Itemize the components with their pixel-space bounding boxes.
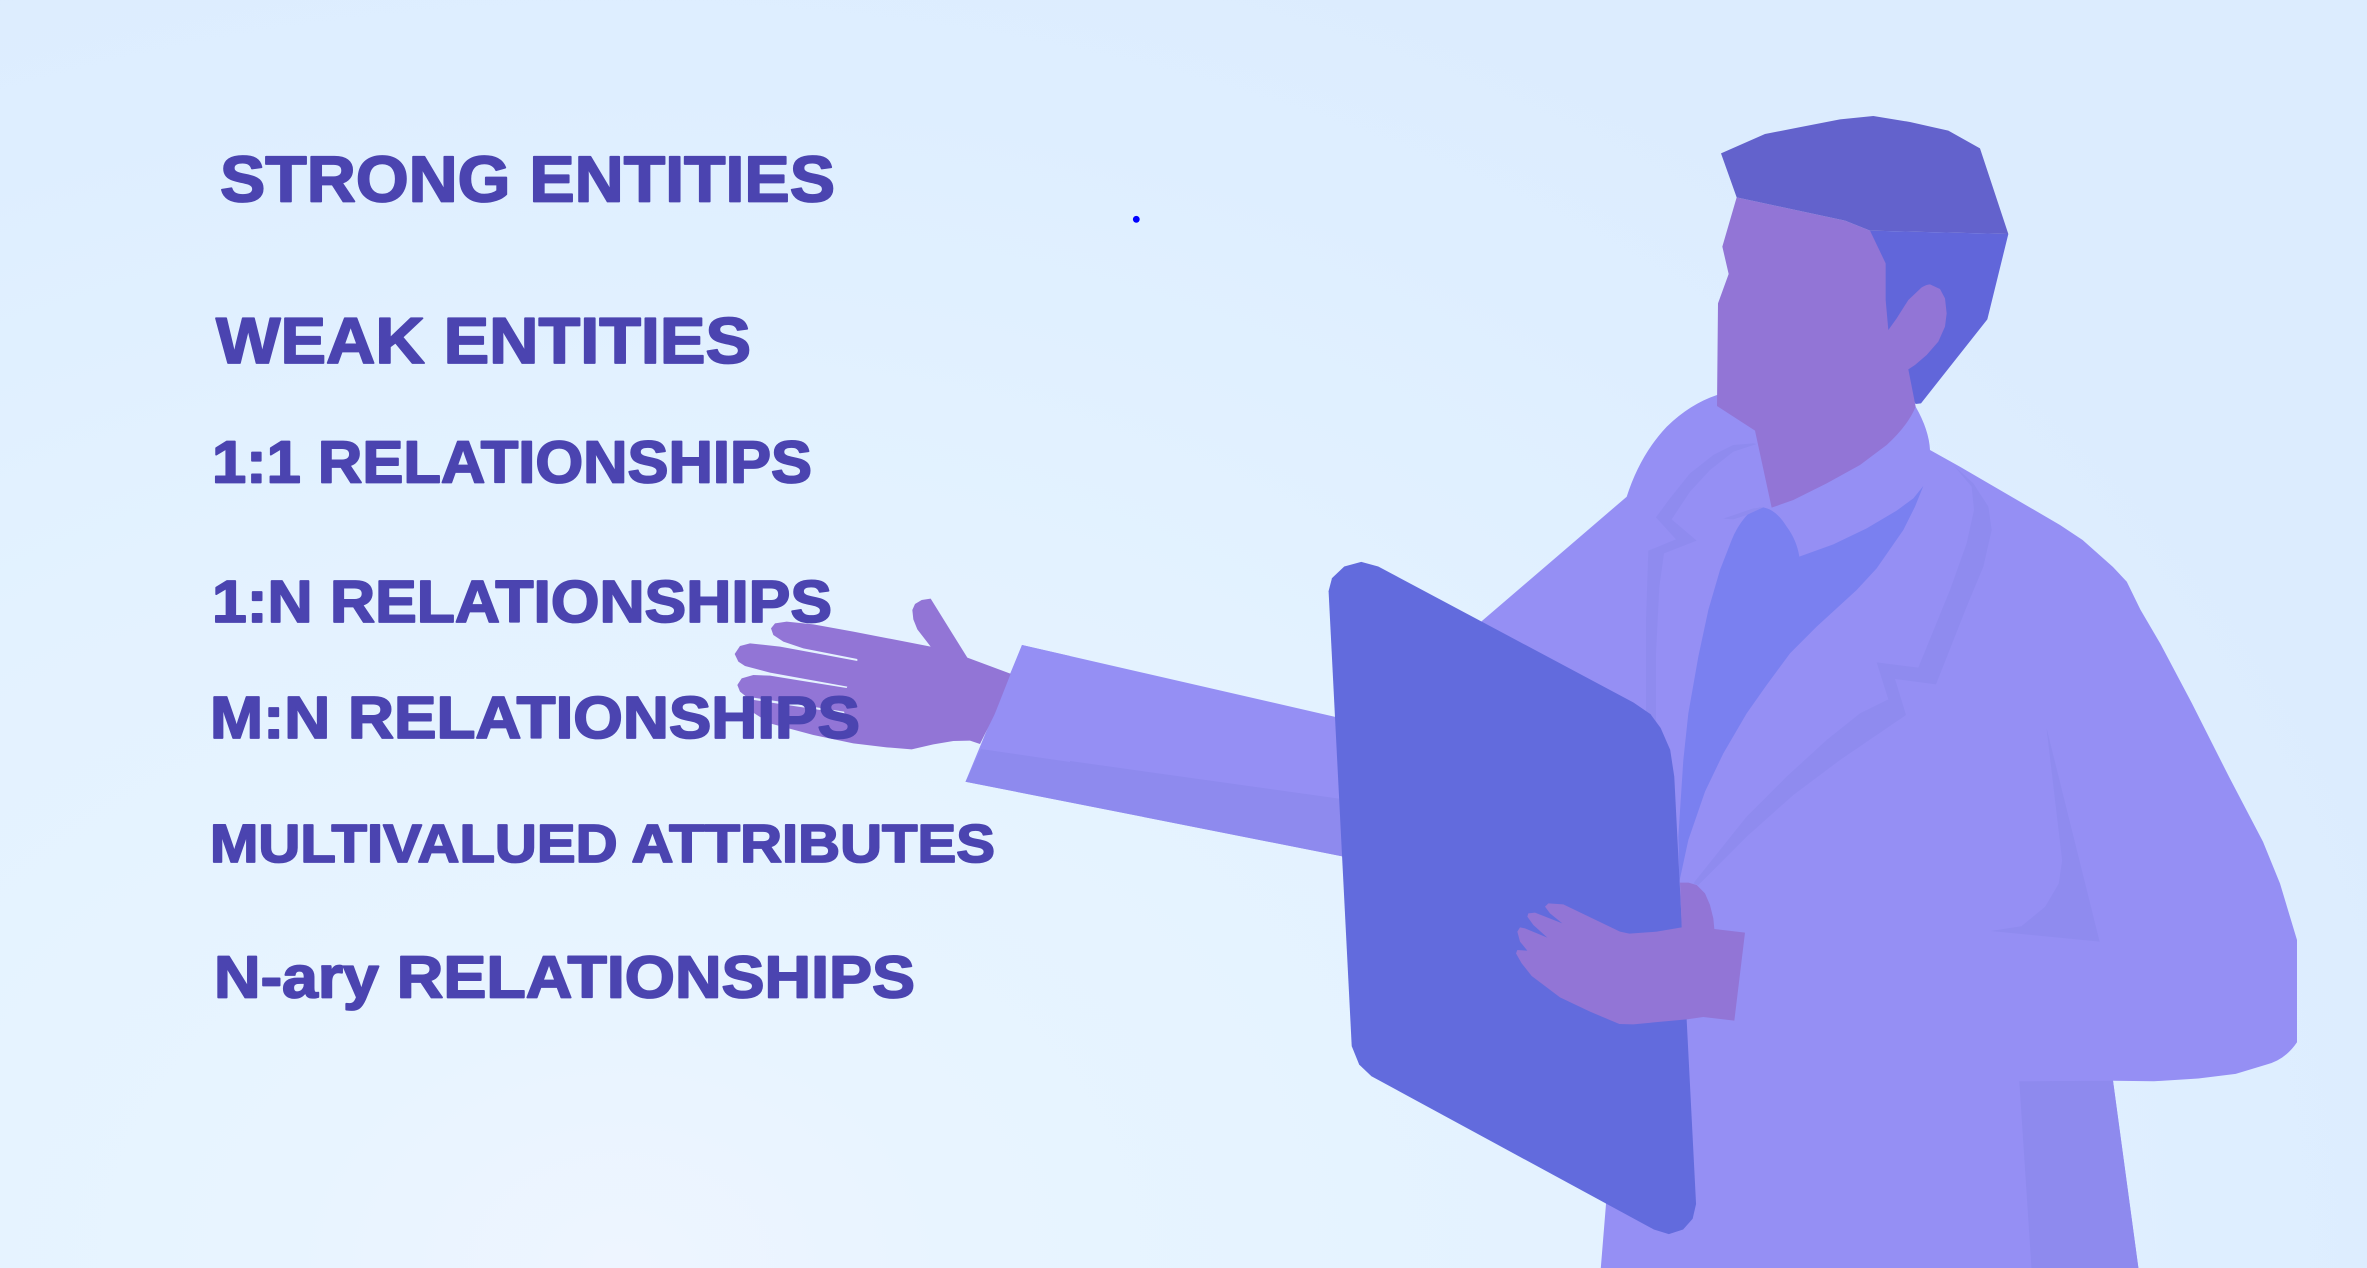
coat pocket shadow	[1991, 728, 2100, 942]
coat lower fold shadow	[2019, 1081, 2138, 1268]
hair: top	[1721, 116, 2008, 234]
heading: weak entities: WEAK ENTITIES	[216, 305, 751, 377]
arm: outstretched sleeve	[966, 645, 1420, 872]
right lapel shadow	[1693, 465, 1992, 885]
shirt and tie	[1678, 486, 1923, 882]
left lapel shadow	[1646, 443, 1757, 722]
hand: holding tablet	[1516, 883, 1745, 1024]
sleeve cuff overlay	[981, 645, 1070, 762]
heading: strong entities: STRONG ENTITIES	[220, 144, 835, 216]
collar shadow	[1723, 507, 1763, 519]
coat body	[1480, 395, 2297, 1268]
heading: 1:N relationships: 1:N RELATIONSHIPS	[212, 568, 832, 635]
face and neck	[1717, 197, 1947, 508]
heading: 1:1 relationships: 1:1 RELATIONSHIPS	[212, 428, 812, 496]
heading: multivalued attributes: MULTIVALUED ATTRIBUTES	[210, 814, 995, 874]
heading: M:N relationships: M:N RELATIONSHIPS	[210, 684, 860, 751]
tablet	[1329, 562, 1696, 1234]
figure: presenter with tablet	[735, 116, 2297, 1268]
hand: open pointing hand	[735, 599, 1014, 749]
hair: back	[1870, 231, 2008, 404]
heading: n-ary relationships: N-ary RELATIONSHIPS	[214, 944, 915, 1010]
head	[1717, 116, 2008, 508]
dot marker	[1133, 216, 1140, 223]
